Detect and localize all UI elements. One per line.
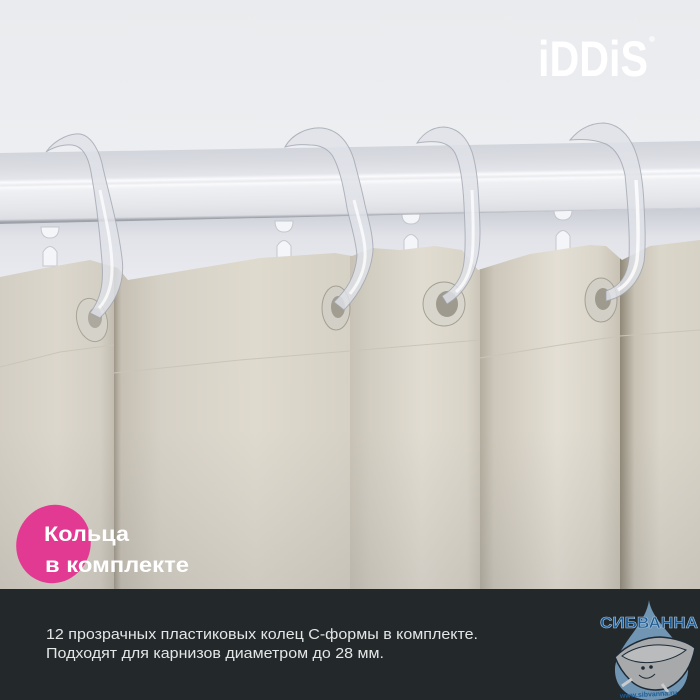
watermark logo: Sibvanna <box>600 600 698 700</box>
description text: Подходят для карнизов диаметром до 28 мм. <box>46 645 384 662</box>
ring 3 <box>417 127 480 304</box>
curtain fabric <box>0 235 700 589</box>
eyelets <box>72 278 617 345</box>
eyelet 4 <box>585 278 617 322</box>
description text <box>46 626 478 662</box>
registered mark <box>649 36 655 42</box>
ring 4 <box>570 123 645 301</box>
ring 2 <box>285 128 373 310</box>
description text: 12 прозрачных пластиковых колец С-формы в комплекте. <box>46 626 478 643</box>
ring 1 <box>46 134 123 318</box>
watermark name: СИБВАННА <box>600 615 698 632</box>
curtain rod <box>0 141 700 224</box>
badge heading <box>44 522 189 577</box>
transparent C-rings <box>46 123 645 318</box>
dark info band <box>0 589 700 700</box>
logo wordmark: iDDiS <box>538 31 648 87</box>
badge heading: Кольца <box>44 522 130 546</box>
eyelet 1 <box>72 295 112 345</box>
water drop <box>615 600 688 700</box>
badge heading: в комплекте <box>45 553 189 577</box>
eyelet 2 <box>322 286 350 330</box>
watermark url: www.sibvanna.ru <box>619 690 677 700</box>
eyelet 3 <box>423 282 465 326</box>
hooks behind the rod <box>41 210 572 266</box>
brand logo <box>538 31 655 87</box>
bathtub mascot <box>615 637 695 692</box>
wall area beneath rod <box>0 208 700 290</box>
wall background <box>0 0 700 300</box>
badge: pink blob <box>5 494 102 594</box>
